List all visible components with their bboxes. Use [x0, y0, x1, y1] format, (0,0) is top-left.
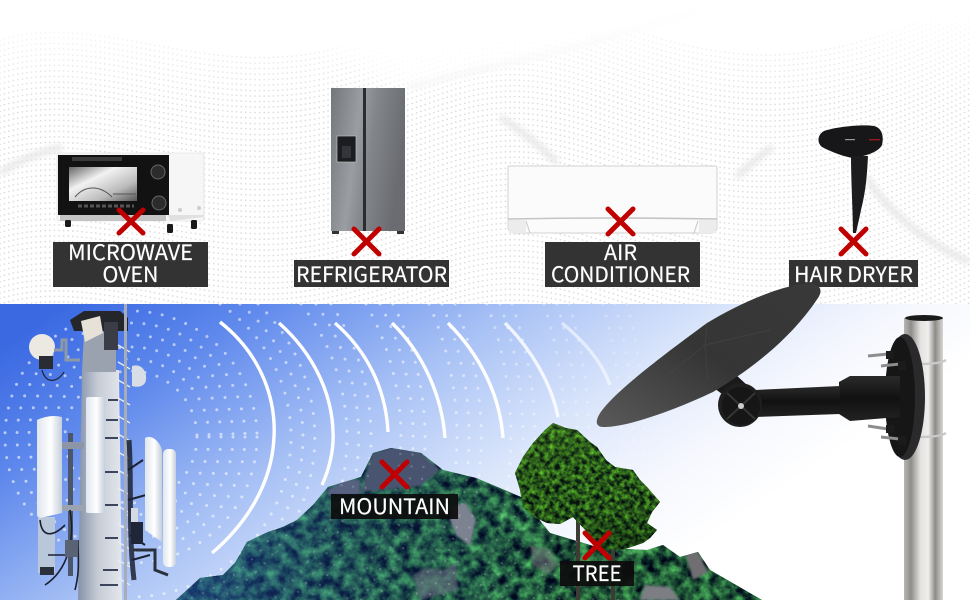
tower ladder and thin pole: [100, 304, 150, 600]
background: white top section with dotted waves: [0, 32, 970, 304]
label: air conditioner: [545, 237, 700, 289]
red cross: mountain: [382, 462, 407, 487]
cell tower: [29, 304, 176, 600]
neck: [714, 374, 748, 400]
label: air conditioner: AIR: [604, 237, 637, 267]
appliance: air conditioner: [508, 166, 717, 233]
wide arm collar: [839, 376, 900, 421]
u-bolts: [920, 360, 946, 437]
ball joint: [718, 383, 762, 427]
label: air conditioner: CONDITIONER: [551, 259, 690, 289]
bolts: [868, 354, 900, 439]
signal wave arcs: [212, 322, 610, 553]
tower mast: [78, 370, 122, 600]
bolt nuts: [886, 351, 906, 445]
appliance: microwave oven: [57, 153, 204, 233]
label: tree: [560, 558, 634, 588]
mountain rock outcrops: [328, 447, 708, 600]
red cross: microwave oven: [119, 210, 143, 233]
tower top radio box: [81, 316, 103, 342]
tower microwave dish left: [29, 334, 80, 380]
antenna dish: [597, 284, 820, 427]
label: tree: TREE: [572, 558, 622, 588]
metal mounting pole: [904, 315, 943, 600]
red cross: hair dryer: [841, 229, 866, 254]
tower panel antenna centre: [86, 397, 105, 513]
tower top cap: [70, 311, 128, 331]
back plate: [885, 334, 925, 460]
tree: [515, 423, 660, 600]
label: microwave oven: OVEN: [102, 259, 158, 289]
red cross: tree: [585, 533, 609, 558]
concentric dotted signal pattern: [5, 304, 645, 600]
faint dots over mountain: [190, 452, 632, 600]
tower panel antennas right: [131, 437, 176, 575]
label: refrigerator: REFRIGERATOR: [296, 259, 447, 289]
tower microwave dish right: [132, 365, 146, 387]
tower panel antenna far left: [37, 416, 86, 590]
label: microwave oven: MICROWAVE: [68, 237, 193, 267]
appliance: refrigerator: [331, 88, 405, 234]
sky panel with blue-to-white gradient: [0, 304, 970, 600]
label: microwave oven: [53, 237, 208, 289]
antenna mount: back plate, bolts and arm: [714, 334, 946, 460]
arm: [755, 386, 840, 417]
appliance: hair dryer: [818, 125, 883, 233]
label: hair dryer: HAIR DRYER: [794, 259, 913, 289]
red cross: air conditioner: [608, 209, 633, 234]
mountain: [170, 440, 770, 600]
label: mountain: MOUNTAIN: [339, 491, 450, 521]
red cross: refrigerator: [354, 229, 379, 254]
